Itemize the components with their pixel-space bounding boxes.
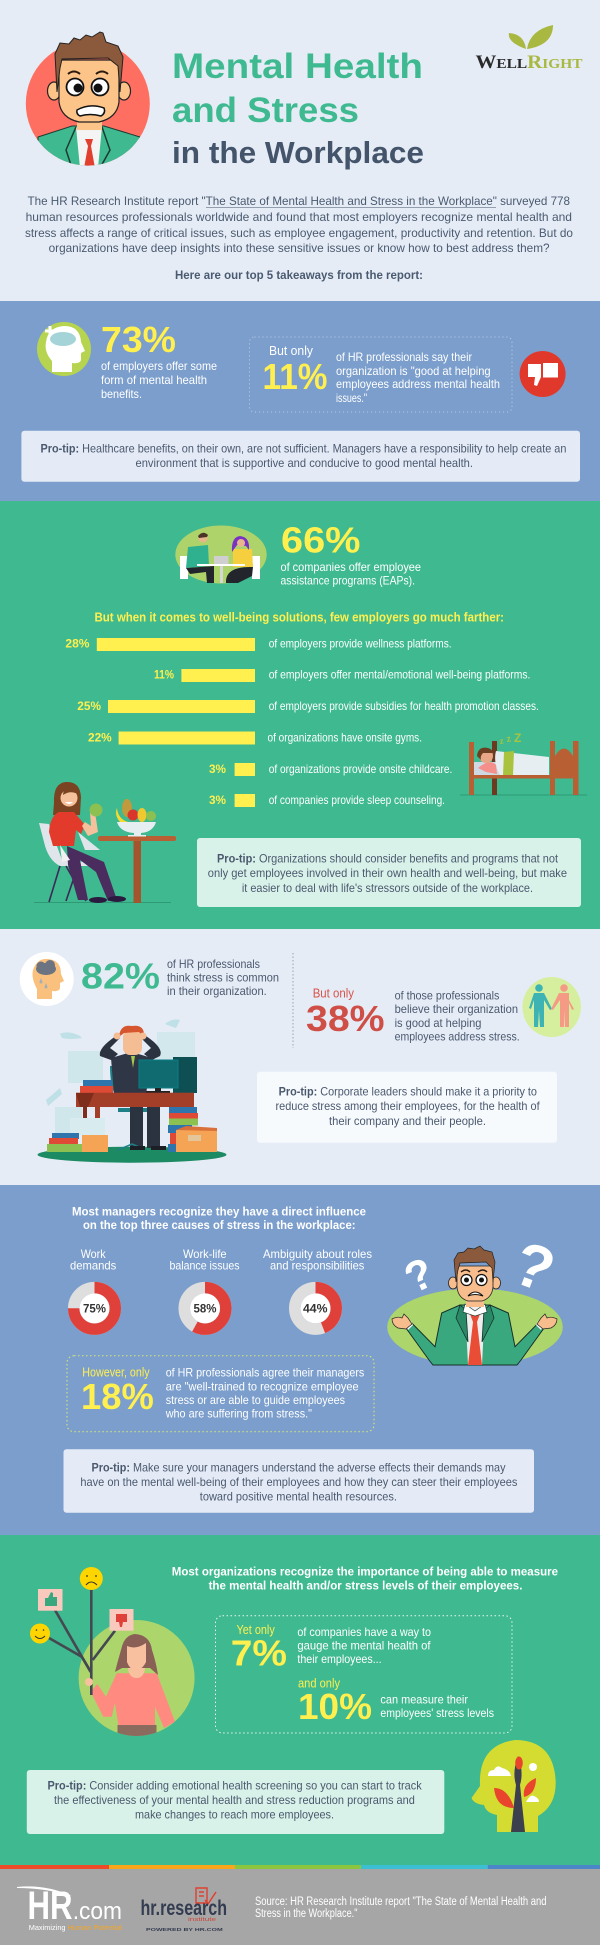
stat: 66 percent: 66% bbox=[281, 520, 360, 561]
bar chart: well-being solutions: 25% bbox=[77, 699, 101, 713]
callout: 18 percent: are "well-trained to recognize employee bbox=[166, 1379, 359, 1393]
bar chart: well-being solutions: 3% bbox=[209, 762, 226, 776]
heading: measuring mental health: the mental health and/or stress levels of their employees. bbox=[209, 1578, 522, 1592]
stat: 82 percent bbox=[81, 955, 279, 998]
bar chart: well-being solutions: of companies provide sleep counseling. bbox=[269, 793, 445, 807]
pro-tip box: only get employees involved in their own health and well-being, but make bbox=[208, 866, 567, 880]
heading: direct influence: on the top three causes of stress in the workplace: bbox=[83, 1218, 356, 1232]
donut: ambiguity about roles: Ambiguity about roles bbox=[263, 1247, 372, 1261]
heading: well-being solutions: But when it comes to well-being solutions, few employers go much farther: bbox=[94, 611, 504, 625]
source note bbox=[255, 1896, 546, 1920]
logo: WellRight bbox=[476, 25, 583, 73]
callout: 11 percent: employees address mental health bbox=[336, 377, 500, 391]
pro-tip box: make changes to reach more employees. bbox=[135, 1808, 334, 1822]
donut: work-life balance: balance issues bbox=[170, 1259, 240, 1273]
panel: takeaway 2 bbox=[0, 501, 600, 929]
donut: work-life balance: Work-life bbox=[183, 1247, 227, 1261]
pro-tip box: the effectiveness of your mental health and stress reduction programs and bbox=[54, 1793, 415, 1807]
callout: 11 percent: 11% bbox=[262, 356, 328, 397]
callout: 18 percent: However, only bbox=[82, 1366, 150, 1380]
icon: woman eating fruit at table bbox=[34, 782, 176, 903]
callout: 7 and 10 percent bbox=[216, 1616, 512, 1733]
callout: 7 and 10 percent: can measure their bbox=[380, 1692, 468, 1706]
heading: measuring mental health bbox=[172, 1565, 558, 1592]
bar chart: well-being solutions: of organizations have onsite gyms. bbox=[268, 730, 422, 744]
donut: work demands: demands bbox=[70, 1259, 116, 1273]
callout: 11 percent: of HR professionals say their bbox=[336, 350, 472, 364]
bar chart: well-being solutions bbox=[65, 637, 539, 807]
pro-tip box bbox=[21, 431, 580, 482]
bar chart: well-being solutions: of employers offer mental/emotional well-being platforms. bbox=[269, 668, 530, 682]
bar chart: well-being solutions: 11% bbox=[154, 668, 174, 682]
heading: measuring mental health: Most organizations recognize the importance of being able to measure bbox=[172, 1565, 558, 1579]
icon: brain head bbox=[37, 322, 91, 376]
callout: 7 and 10 percent: gauge the mental health of bbox=[297, 1639, 431, 1653]
icon: sleeping person in bed: z bbox=[506, 733, 512, 744]
stat: 38 percent: 38% bbox=[306, 998, 385, 1039]
donut: ambiguity about roles: 44% bbox=[303, 1304, 328, 1316]
donut: work demands: 75% bbox=[83, 1304, 106, 1316]
donut: ambiguity about roles: and responsibilities bbox=[270, 1259, 364, 1273]
illustration: woman holding feedback signs bbox=[30, 1567, 195, 1737]
illustration: confused man with question marks: ? bbox=[397, 1249, 441, 1303]
title bbox=[172, 47, 424, 170]
stat: 38 percent bbox=[306, 986, 520, 1044]
pro-tip box: their company and their people. bbox=[329, 1114, 486, 1128]
pro-tip box: have on the mental well-being of their employees and how they can steer their employees bbox=[80, 1475, 517, 1489]
stat: 38 percent: employees address stress. bbox=[395, 1030, 520, 1044]
pro-tip box: environment that is supportive and conducive to good mental health. bbox=[136, 456, 473, 470]
icon: head with storm cloud bbox=[20, 952, 74, 1006]
bar chart: well-being solutions: of employers provide subsidies for health promotion classes. bbox=[269, 699, 539, 713]
footer bbox=[0, 1869, 600, 1945]
title: and Stress bbox=[172, 91, 359, 130]
pro-tip box: toward positive mental health resources. bbox=[200, 1490, 397, 1504]
icon: two figures shaking hands bbox=[522, 977, 581, 1037]
donut: work-life balance bbox=[170, 1247, 240, 1329]
illustration: confused man with question marks: ? bbox=[504, 1229, 563, 1306]
bar chart: well-being solutions: of employers provide wellness platforms. bbox=[269, 637, 452, 651]
callout: 7 and 10 percent: and only bbox=[298, 1677, 341, 1691]
callout: 11 percent: organization is "good at helping bbox=[336, 364, 491, 378]
stat: 66 percent bbox=[280, 520, 421, 588]
title: in the Workplace bbox=[172, 135, 424, 170]
callout: 11 percent bbox=[250, 337, 512, 412]
callout: 18 percent: of HR professionals agree their managers bbox=[166, 1366, 364, 1380]
stat: 73 percent: benefits. bbox=[101, 387, 142, 401]
logo: hr research institute: POWERED BY HR.COM bbox=[146, 1927, 223, 1932]
logo: HR.com: .com bbox=[73, 1898, 122, 1925]
callout: 7 and 10 percent: of companies have a way to bbox=[297, 1625, 431, 1639]
callout: 18 percent bbox=[67, 1356, 374, 1432]
intro paragraph: The HR Research Institute report "The State of Mental Health and Stress in the Workplace" surveyed 778 bbox=[28, 194, 570, 208]
stat: 66 percent: assistance programs (EAPs). bbox=[280, 574, 415, 588]
icon: sleeping person in bed bbox=[460, 731, 587, 796]
stat: 73 percent: of employers offer some bbox=[101, 359, 217, 373]
colour stripe bbox=[0, 1865, 600, 1869]
panel: takeaway 3 bbox=[0, 929, 600, 1185]
panel: takeaway 5 bbox=[0, 1535, 600, 1865]
source note: Stress in the Workplace." bbox=[255, 1908, 358, 1920]
pro-tip box: Pro-tip: Consider adding emotional health screening so you can start to track bbox=[48, 1778, 423, 1792]
stat: 73 percent: form of mental health bbox=[101, 373, 207, 387]
heading: direct influence bbox=[72, 1205, 366, 1232]
logo: hr research institute bbox=[140, 1888, 227, 1932]
stat: 38 percent: of those professionals bbox=[395, 989, 499, 1003]
callout: 11 percent: issues." bbox=[336, 391, 367, 405]
callout: 7 and 10 percent: 10% bbox=[298, 1686, 372, 1727]
pro-tip box: reduce stress among their employees, for the health of bbox=[276, 1099, 540, 1113]
pro-tip box: Pro-tip: Make sure your managers understand the adverse effects their demands may bbox=[92, 1460, 506, 1474]
intro lead-in: Here are our top 5 takeaways from the report: bbox=[175, 268, 423, 282]
stat: 82 percent: 82% bbox=[81, 955, 160, 996]
donut: work-life balance: 58% bbox=[194, 1304, 216, 1316]
header bbox=[25, 25, 583, 282]
icon: sleeping person in bed: Z bbox=[514, 731, 521, 745]
stat: 66 percent: of companies offer employee bbox=[280, 560, 421, 574]
callout: 7 and 10 percent: 7% bbox=[231, 1633, 287, 1674]
callout: 18 percent: who are suffering from stress." bbox=[165, 1407, 312, 1421]
stat: 38 percent: is good at helping bbox=[395, 1016, 481, 1030]
source note: Source: HR Research Institute report "The State of Mental Health and bbox=[255, 1896, 546, 1908]
icon: stressed man in circle bbox=[26, 32, 150, 170]
logo: HR.com: HR bbox=[28, 1884, 73, 1928]
bar chart: well-being solutions: 3% bbox=[209, 793, 226, 807]
bar chart: well-being solutions: of organizations provide onsite childcare. bbox=[269, 762, 452, 776]
panel: takeaway 4 bbox=[0, 1185, 600, 1535]
intro paragraph: stress affects a range of critical issues, such as employee engagement, productivity and retention. But do bbox=[25, 226, 573, 240]
illustration: overwhelmed worker at desk bbox=[38, 1020, 226, 1163]
illustration: confused man with question marks bbox=[387, 1229, 563, 1366]
panel: takeaway 1 bbox=[0, 301, 600, 501]
pro-tip box bbox=[257, 1072, 557, 1143]
logo: WellRight: WELLRIGHT bbox=[476, 52, 583, 73]
logo: HR.com bbox=[17, 1884, 122, 1932]
pro-tip box: it easier to deal with life's stressors outside of the workplace. bbox=[242, 881, 533, 895]
stat: 82 percent: in their organization. bbox=[167, 984, 267, 998]
stat: 73 percent bbox=[101, 319, 217, 401]
callout: 7 and 10 percent: their employees... bbox=[297, 1652, 382, 1666]
icon: head with growing plant bbox=[472, 1740, 556, 1832]
heading: direct influence: Most managers recognize they have a direct influence bbox=[72, 1205, 366, 1219]
callout: 11 percent: But only bbox=[269, 343, 313, 358]
callout: 18 percent: 18% bbox=[81, 1376, 154, 1417]
stat: 38 percent: believe their organization bbox=[395, 1002, 518, 1016]
donut: ambiguity about roles bbox=[263, 1247, 372, 1329]
title: Mental Health bbox=[172, 47, 423, 86]
callout: 7 and 10 percent: employees' stress levels bbox=[380, 1706, 494, 1720]
bar chart: well-being solutions: 28% bbox=[65, 637, 90, 651]
logo: HR.com: Maximizing Human Potential bbox=[29, 1923, 122, 1932]
pro-tip box: Pro-tip: Corporate leaders should make it a priority to bbox=[279, 1085, 537, 1099]
intro paragraph bbox=[25, 194, 573, 255]
pro-tip box: Pro-tip: Healthcare benefits, on their own, are not sufficient. Managers have a responsibility to help create an bbox=[40, 442, 566, 456]
callout: 18 percent: stress or are able to guide employees bbox=[166, 1393, 345, 1407]
icon: thumbs down bbox=[520, 351, 566, 397]
pro-tip box bbox=[27, 1770, 444, 1834]
logo: hr research institute: hr.research bbox=[140, 1897, 227, 1920]
stat: 73 percent: 73% bbox=[101, 319, 176, 360]
stat: 38 percent: But only bbox=[313, 986, 354, 1001]
pro-tip box: Pro-tip: Organizations should consider benefits and programs that not bbox=[217, 852, 559, 866]
donut: work demands: Work bbox=[81, 1247, 106, 1261]
icon: sleeping person in bed: z bbox=[499, 736, 504, 746]
donut: work demands bbox=[70, 1247, 116, 1329]
icon: two people at a table bbox=[175, 526, 267, 584]
pro-tip box bbox=[64, 1449, 534, 1513]
intro paragraph: human resources professionals worldwide and found that most employers recognize mental health and bbox=[26, 210, 572, 224]
callout: 7 and 10 percent: Yet only bbox=[236, 1623, 275, 1637]
logo: hr research institute: institute bbox=[188, 1917, 216, 1923]
stat: 82 percent: of HR professionals bbox=[167, 957, 260, 971]
intro paragraph: organizations have deep insights into these sensitive issues or know how to best address them? bbox=[49, 241, 550, 255]
bar chart: well-being solutions: 22% bbox=[88, 730, 112, 744]
pro-tip box bbox=[197, 838, 581, 907]
stat: 82 percent: think stress is common bbox=[167, 971, 279, 985]
